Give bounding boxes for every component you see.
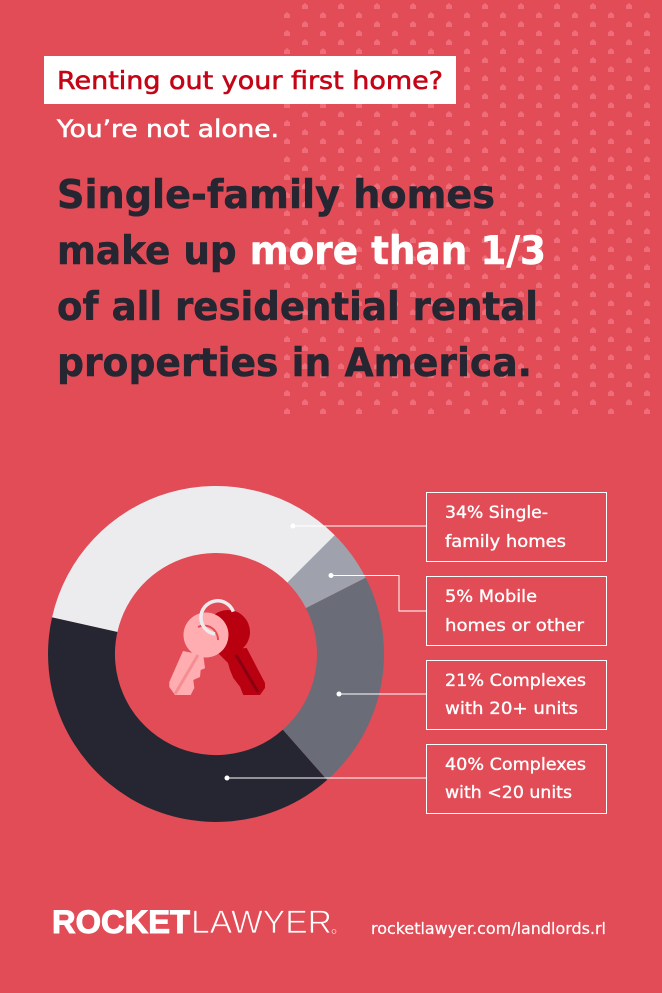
callout: 21% complexes with 20+ units <box>336 660 606 730</box>
icon: keys <box>169 601 265 695</box>
slice: 21% complexes with 20+ units <box>283 578 384 780</box>
callout: 34% single-family homes: 34% Single- <box>445 503 548 523</box>
slice: 34% single-family homes <box>52 486 335 632</box>
callout: 5% mobile homes or other <box>328 573 606 646</box>
callout: 34% single-family homes: family homes <box>445 532 566 552</box>
callout: 5% mobile homes or other: 5% Mobile <box>445 587 537 607</box>
slice: 40% complexes with under 20 units <box>48 617 327 822</box>
callout: 21% complexes with 20+ units: with 20+ units <box>445 699 578 719</box>
logo: Rocket Lawyer: LAWYER <box>191 904 332 940</box>
callout: 21% complexes with 20+ units: 21% Complexes <box>445 671 586 691</box>
callout: 40% complexes with under 20 units: with <20 units <box>445 783 572 803</box>
callout: 5% mobile homes or other: homes or other <box>445 616 584 636</box>
slice: 5% mobile homes or other <box>287 535 366 608</box>
headline: Single-family homes <box>57 173 495 218</box>
donut chart <box>48 486 384 822</box>
headline <box>57 173 546 386</box>
headline: make up more than 1/3 <box>57 229 546 274</box>
logo: Rocket Lawyer <box>52 904 336 940</box>
pink key <box>169 612 228 695</box>
callout: 40% complexes with under 20 units: 40% Complexes <box>445 755 586 775</box>
kicker label <box>44 56 456 104</box>
logo: Rocket Lawyer: ROCKET <box>52 904 190 940</box>
dark red key <box>206 610 265 695</box>
dot pattern of small houses <box>284 0 662 415</box>
key ring <box>201 601 233 634</box>
headline: of all residential rental <box>57 285 538 330</box>
callout: 40% complexes with under 20 units <box>224 744 606 814</box>
kicker label: Renting out your first home? <box>57 66 443 95</box>
subheading: You’re not alone. <box>56 115 279 143</box>
headline: properties in America. <box>57 341 532 386</box>
website url: rocketlawyer.com/landlords.rl <box>371 919 606 938</box>
callout: 34% single-family homes <box>290 492 606 562</box>
